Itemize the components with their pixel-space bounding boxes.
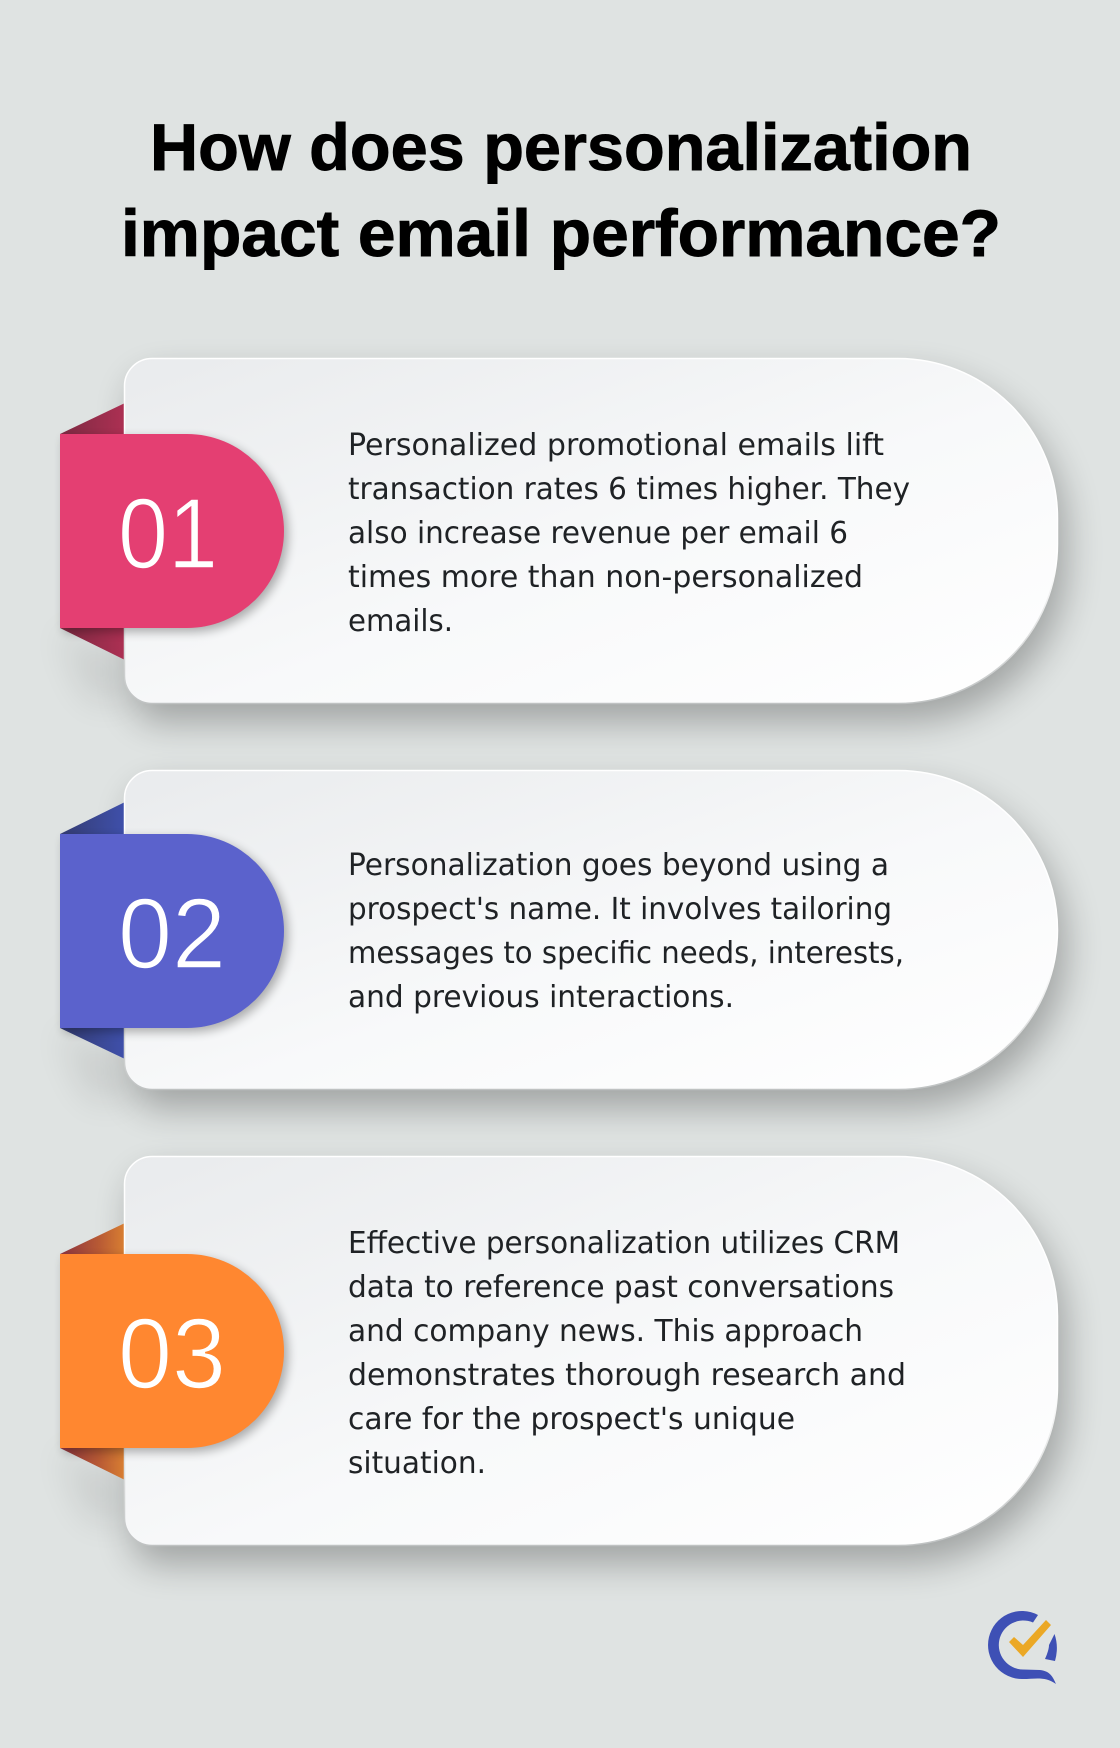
fold: bottom ribbon	[60, 1448, 125, 1480]
panel: step 02	[60, 770, 1066, 1108]
text block: Personalized promotional emails lift	[348, 428, 884, 463]
badge	[60, 1254, 284, 1448]
text block: times more than non-personalized	[348, 560, 863, 595]
text block: data to reference past conversations	[348, 1270, 894, 1305]
number 02: 02	[118, 878, 226, 990]
badge shadow	[64, 838, 288, 1032]
icon: logo speech bubble with check	[988, 1611, 1057, 1684]
text block	[348, 428, 910, 639]
text block: Personalization goes beyond using a	[348, 848, 889, 883]
fold: bottom ribbon	[60, 628, 125, 660]
badge	[60, 834, 284, 1028]
text block: and company news. This approach	[348, 1314, 863, 1349]
panel: step 03	[60, 1156, 1066, 1564]
card	[124, 770, 1058, 1090]
title: impact email performance?	[121, 196, 1001, 270]
text block: also increase revenue per email 6	[348, 516, 848, 551]
fold: top ribbon	[60, 802, 125, 834]
text block: prospect's name. It involves tailoring	[348, 892, 892, 927]
text block: care for the prospect's unique	[348, 1402, 795, 1437]
fold: top ribbon	[60, 403, 125, 434]
title	[121, 110, 1001, 270]
title: How does personalization	[150, 110, 972, 184]
number 03: 03	[118, 1298, 226, 1410]
text block: situation.	[348, 1446, 486, 1481]
card	[124, 1156, 1058, 1546]
badge shadow	[64, 438, 288, 632]
text block: demonstrates thorough research and	[348, 1358, 906, 1393]
text block: transaction rates 6 times higher. They	[348, 472, 910, 507]
badge shadow	[64, 1258, 288, 1452]
fold: bottom ribbon	[60, 1028, 125, 1059]
text block: emails.	[348, 604, 453, 639]
card	[124, 358, 1058, 704]
text block: and previous interactions.	[348, 980, 734, 1015]
number 01: 01	[118, 478, 218, 590]
badge	[60, 434, 284, 628]
fold: top ribbon	[60, 1223, 125, 1254]
text block	[348, 1226, 906, 1481]
text block: Effective personalization utilizes CRM	[348, 1226, 900, 1261]
text block	[348, 848, 904, 1015]
panel: step 01	[60, 358, 1066, 722]
text block: messages to specific needs, interests,	[348, 936, 904, 971]
